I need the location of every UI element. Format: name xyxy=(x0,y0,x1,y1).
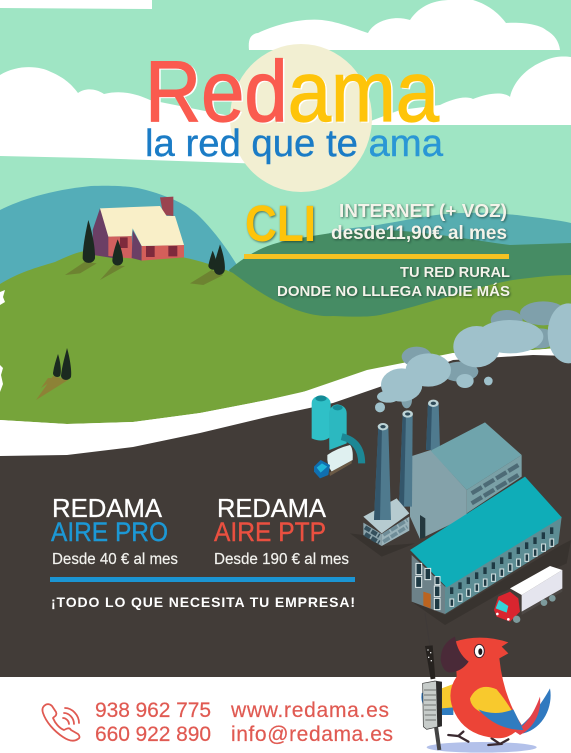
logo wordmark highlight: Redama xyxy=(146,45,441,141)
icon: phone xyxy=(42,704,80,741)
ground: dark xyxy=(0,355,571,677)
plan: Redama Aire Pro: AIRE PRO xyxy=(51,517,168,547)
logo wordmark: Redama xyxy=(145,44,439,140)
CLI heading: CLI xyxy=(245,195,316,252)
house middle wall xyxy=(132,230,142,261)
sun xyxy=(230,44,372,192)
antenna upper xyxy=(425,645,435,679)
logo tagline: la red que te ama xyxy=(145,123,444,165)
antenna dots xyxy=(427,649,432,661)
rural slogan: TU RED RURAL xyxy=(400,264,510,281)
lower windows xyxy=(450,539,554,606)
silos xyxy=(312,395,362,463)
back wing blue tip xyxy=(442,707,453,715)
legs xyxy=(448,732,508,745)
contact web and email xyxy=(230,699,393,746)
house roof xyxy=(100,206,184,246)
tree shadows xyxy=(65,262,223,285)
red truck xyxy=(494,566,562,623)
wing xyxy=(470,687,515,717)
long building xyxy=(410,477,562,614)
house front wall xyxy=(142,245,184,261)
hill: left teal xyxy=(0,186,240,300)
plan: Redama Aire PTP xyxy=(214,495,349,568)
parrot mascot with antenna xyxy=(421,613,551,753)
house with trees xyxy=(65,197,225,285)
contact phones: 938 962 775 xyxy=(95,699,211,722)
house rear wall xyxy=(108,236,133,259)
smoke front xyxy=(375,303,571,412)
contact phones xyxy=(95,699,211,746)
white specks on left edge xyxy=(0,290,5,392)
house windows xyxy=(120,237,177,257)
hill: right teal xyxy=(290,213,571,300)
tanker truck xyxy=(314,445,353,478)
house left wall xyxy=(93,208,115,258)
chimney 3 xyxy=(426,400,440,450)
plan: Redama Aire PTP: REDAMA xyxy=(217,495,326,523)
upper windows xyxy=(450,527,553,594)
tail feathers xyxy=(513,688,551,735)
pupil xyxy=(478,648,482,655)
plan: Redama Aire PTP: Desde 190 € al mes xyxy=(214,551,349,568)
yellow divider xyxy=(244,254,509,259)
CLI price text xyxy=(331,201,507,244)
wing blue xyxy=(478,709,523,730)
plan: Redama Aire Pro: Desde 40 € al mes xyxy=(52,551,178,568)
chimney base block xyxy=(363,498,409,546)
hill: dark green xyxy=(229,230,571,330)
cloud: left xyxy=(0,67,300,165)
ground shadow xyxy=(350,533,571,625)
footer: white xyxy=(0,677,571,753)
cloud: top left strip xyxy=(0,0,152,9)
blue divider xyxy=(50,577,355,582)
parrot claw xyxy=(421,690,429,706)
meadow: green xyxy=(0,249,571,424)
antenna panel dark side xyxy=(436,681,442,727)
house chimney xyxy=(160,197,173,216)
antenna panel slots xyxy=(424,690,436,720)
rural slogan xyxy=(277,264,510,300)
beak xyxy=(441,637,469,673)
rural slogan: DONDE NO LLLEGA NADIE MÁS xyxy=(277,283,510,300)
contact web and email: www.redama.es xyxy=(230,699,389,722)
eye xyxy=(474,644,484,658)
CLI price text: desde11,90€ al mes xyxy=(331,223,507,244)
trees lower with shadow xyxy=(36,348,71,400)
plan: Redama Aire Pro xyxy=(51,495,178,568)
contact phones: 660 922 890 xyxy=(95,723,211,746)
cloud: top right xyxy=(249,0,560,50)
road: white band xyxy=(0,347,571,456)
sky background xyxy=(0,0,571,340)
end windows xyxy=(416,563,440,610)
back wing xyxy=(442,683,455,713)
cloud: right xyxy=(360,56,571,125)
main hall xyxy=(410,422,522,539)
mast lower pole xyxy=(436,727,439,750)
plan: Redama Aire PTP: AIRE PTP xyxy=(214,517,326,547)
antenna panel xyxy=(423,681,442,729)
parrot shadow xyxy=(427,742,537,753)
smoke back xyxy=(401,301,567,408)
plan: Redama Aire Pro: REDAMA xyxy=(52,495,162,523)
chimney 1 xyxy=(374,423,391,520)
chimney 2 xyxy=(399,410,413,507)
factory illustration xyxy=(312,301,571,625)
CLI price text: INTERNET (+ VOZ) xyxy=(339,201,507,221)
logo xyxy=(145,44,444,165)
contact web and email: info@redama.es xyxy=(231,723,393,746)
body xyxy=(450,638,522,738)
business slogan: ¡TODO LO QUE NECESITA TU EMPRESA! xyxy=(51,594,355,610)
door xyxy=(423,592,431,608)
trees xyxy=(83,220,225,275)
mast xyxy=(425,613,430,647)
